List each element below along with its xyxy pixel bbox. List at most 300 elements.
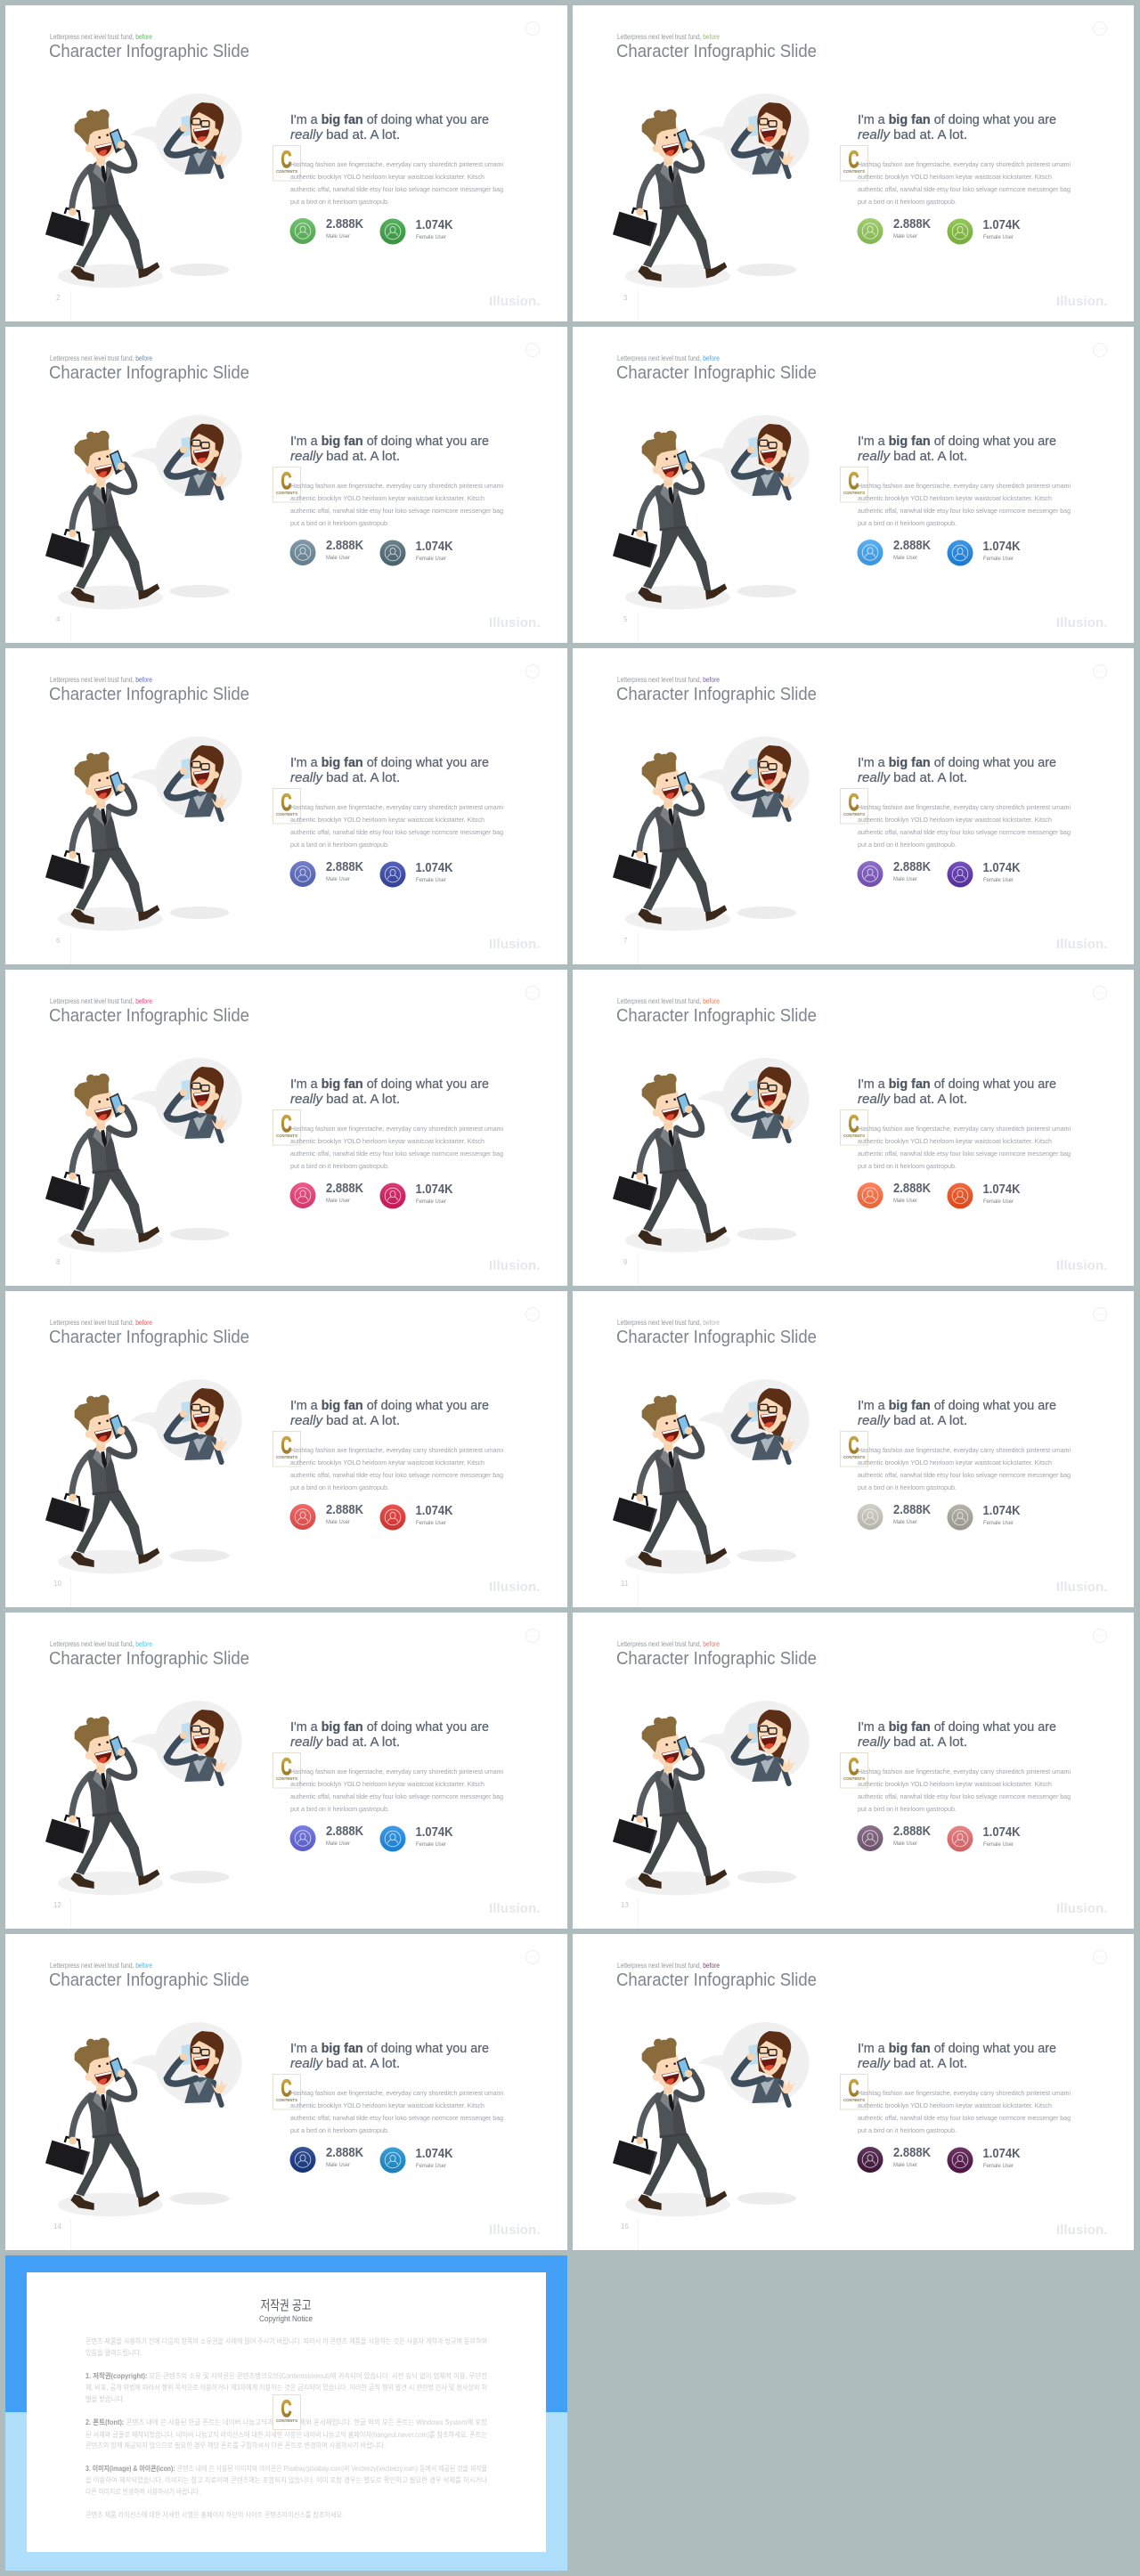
watermark badge [273, 146, 301, 181]
heading: I'm a big fan of doing what you are [290, 756, 489, 770]
slide subtitle: Letterpress next level trust fund, before [617, 676, 720, 684]
stat: male user: 2.888K [893, 860, 931, 874]
stat: female user: 1.074K [415, 1504, 453, 1518]
icon: menu dots [525, 344, 540, 356]
heading: really bad at. A lot. [290, 771, 400, 785]
stat: male user [290, 1503, 363, 1530]
stat: male user [290, 1824, 363, 1851]
body paragraph [858, 1767, 1071, 1813]
watermark badge [841, 2075, 867, 2109]
body paragraph: authentic offal, narwhal tilde etsy four loko selvage normcore messenger bag [858, 828, 1071, 836]
body paragraph: authentic brooklyn YOLO heirloom keytar waistcoat kickstarter. Kitsch [858, 173, 1052, 181]
slide background [573, 648, 1134, 964]
stat: female user: 1.074K [983, 218, 1021, 232]
stat: male user: Male User [893, 1199, 917, 1204]
watermark badge: CONTENTS [843, 1455, 865, 1459]
body paragraph: authentic brooklyn YOLO heirloom keytar waistcoat kickstarter. Kitsch [290, 2101, 484, 2109]
stat: male user: 2.888K [326, 539, 363, 553]
stat: male user: Male User [893, 1520, 917, 1525]
stat: female user [379, 540, 453, 566]
slide title: Character Infographic Slide [616, 1649, 817, 1669]
stat: female user [948, 540, 1021, 566]
slide subtitle: Letterpress next level trust fund, before [617, 1319, 720, 1327]
watermark badge: CONTENTS [276, 169, 297, 174]
body paragraph: put a bird on it heirloom gastropub. [858, 1162, 957, 1170]
copyright clause 3 [86, 2464, 488, 2496]
icon: menu dots [1094, 1629, 1106, 1642]
copyright clause 2: 된 서체와 글꼴로 제작되었습니다. 네이버 나눔고딕 라이선스에 대한 자세한 사항은 네이버 나눔고딕 홈페이지(hangeul.naver.com)를 참조하세요. 폰트는 [86, 2430, 487, 2439]
slide subtitle: Letterpress next level trust fund, before [50, 1319, 152, 1327]
page number: 8 [56, 1258, 61, 1266]
stat: male user: Male User [893, 556, 917, 561]
watermark badge [841, 1109, 867, 1145]
copyright clause 1 [86, 2371, 487, 2403]
slide subtitle: Letterpress next level trust fund, before [617, 354, 720, 362]
stat: female user [948, 1504, 1021, 1530]
watermark badge [841, 1752, 867, 1788]
page number: 15 [621, 2223, 629, 2231]
stat: male user [857, 860, 931, 887]
body paragraph: Hashtag fashion axe fingerstache, everyday carry shoreditch pinterest umami [290, 1767, 503, 1776]
stat: female user: 1.074K [415, 1182, 453, 1197]
stat: female user: Female User [983, 2164, 1014, 2169]
copyright clause 1: 제, 비표, 공개 위법에 따라서 행위 목적으로 이용하거나 제3자에게 이용하는 것은 금지되어 있습니다. 이러한 금칙 행위 발견 시 관련법 민사 및 형사상의 처 [86, 2383, 487, 2392]
page number: 14 [53, 2223, 61, 2231]
watermark badge: C [281, 1432, 292, 1459]
stat: male user: Male User [326, 1520, 350, 1525]
body paragraph: authentic brooklyn YOLO heirloom keytar waistcoat kickstarter. Kitsch [290, 173, 484, 181]
stat: female user [948, 218, 1021, 244]
body paragraph: put a bird on it heirloom gastropub. [290, 1805, 389, 1813]
heading: really bad at. A lot. [858, 2057, 967, 2071]
body paragraph: put a bird on it heirloom gastropub. [290, 198, 389, 206]
body paragraph [858, 482, 1071, 527]
body paragraph: authentic brooklyn YOLO heirloom keytar waistcoat kickstarter. Kitsch [858, 816, 1052, 824]
brand mark: Illusion. [489, 294, 540, 309]
body paragraph: authentic offal, narwhal tilde etsy four loko selvage normcore messenger bag [290, 1792, 503, 1800]
body paragraph: authentic brooklyn YOLO heirloom keytar waistcoat kickstarter. Kitsch [858, 1780, 1052, 1788]
stat: female user: Female User [983, 878, 1014, 883]
watermark badge: CONTENTS [276, 1134, 297, 1138]
body paragraph: authentic offal, narwhal tilde etsy four loko selvage normcore messenger bag [858, 1471, 1071, 1479]
body paragraph [290, 803, 503, 849]
slide 6: indigo [5, 648, 567, 964]
body paragraph: authentic brooklyn YOLO heirloom keytar waistcoat kickstarter. Kitsch [290, 494, 484, 502]
stat: male user: Male User [893, 2163, 917, 2168]
stat: female user [379, 2147, 453, 2173]
body paragraph: authentic brooklyn YOLO heirloom keytar waistcoat kickstarter. Kitsch [858, 494, 1052, 502]
stat: male user [857, 1824, 931, 1851]
body paragraph: Hashtag fashion axe fingerstache, everyday carry shoreditch pinterest umami [290, 160, 503, 168]
stat: male user: 2.888K [893, 1824, 931, 1839]
body paragraph: Hashtag fashion axe fingerstache, everyday carry shoreditch pinterest umami [858, 1125, 1071, 1133]
heading [290, 113, 489, 142]
icon: menu dots [1094, 344, 1106, 356]
body paragraph: authentic offal, narwhal tilde etsy four loko selvage normcore messenger bag [290, 1150, 503, 1158]
stat: female user: Female User [983, 1842, 1014, 1848]
copyright intro: 콘텐츠 제품을 사용하기 전에 다음의 항목의 소유권을 사례에 읽어 주시기 바랍니다. 따라서 이 콘텐츠 제품을 사용하는 것은 사용자 계약과 법규에 동의하여 [86, 2336, 487, 2345]
body paragraph [290, 2089, 503, 2134]
page number: 12 [53, 1901, 61, 1909]
body paragraph: authentic brooklyn YOLO heirloom keytar waistcoat kickstarter. Kitsch [290, 1459, 484, 1467]
slide 3: light green [573, 5, 1134, 321]
heading [858, 113, 1056, 142]
brand mark: Illusion. [489, 1258, 540, 1273]
body paragraph: Hashtag fashion axe fingerstache, everyday carry shoreditch pinterest umami [858, 803, 1071, 811]
watermark badge: CONTENTS [843, 169, 865, 174]
stat: female user: Female User [416, 2164, 446, 2169]
stat: female user: 1.074K [983, 1182, 1021, 1197]
watermark badge: CONTENTS [276, 1776, 297, 1781]
copyright blue band [5, 2255, 567, 2412]
page number: 11 [621, 1580, 629, 1588]
stat: male user: 2.888K [893, 217, 931, 232]
body paragraph: put a bird on it heirloom gastropub. [290, 841, 389, 849]
heading [290, 756, 489, 785]
body paragraph [858, 1446, 1071, 1491]
body paragraph: authentic offal, narwhal tilde etsy four loko selvage normcore messenger bag [290, 828, 503, 836]
watermark badge: CONTENTS [276, 2418, 297, 2423]
heading: I'm a big fan of doing what you are [290, 435, 489, 449]
body paragraph: authentic offal, narwhal tilde etsy four loko selvage normcore messenger bag [290, 2114, 503, 2122]
body paragraph: Hashtag fashion axe fingerstache, everyday carry shoreditch pinterest umami [858, 482, 1071, 490]
heading [858, 1077, 1056, 1107]
stat: male user: 2.888K [893, 1503, 931, 1517]
body paragraph: authentic offal, narwhal tilde etsy four loko selvage normcore messenger bag [858, 1150, 1071, 1158]
body paragraph [858, 160, 1071, 206]
watermark badge: C [848, 789, 859, 816]
icon: menu dots [525, 664, 540, 679]
stat: female user: Female User [416, 1521, 446, 1526]
slide title: Character Infographic Slide [616, 1006, 817, 1026]
icon: menu dots [1094, 1950, 1106, 1964]
heading: I'm a big fan of doing what you are [858, 2042, 1056, 2056]
heading [858, 1399, 1056, 1428]
panel: copyright notice [5, 2255, 567, 2571]
heading [858, 1720, 1056, 1750]
slide subtitle: Letterpress next level trust fund, before [50, 676, 152, 684]
stat: male user [857, 2146, 931, 2173]
slide title: Character Infographic Slide [49, 42, 249, 61]
slide subtitle: Letterpress next level trust fund, before [617, 33, 720, 41]
stat: female user [379, 861, 453, 887]
page number: 7 [623, 937, 628, 945]
stat: female user: Female User [983, 235, 1014, 240]
heading: really bad at. A lot. [290, 1414, 400, 1428]
copyright clause 1: 1. 저작권(copyright): 모든 콘텐츠의 소유 및 저작권은 콘텐츠뱅크오브(Contentstoreout)에 귀속되어 있습니다. 사전 승낙 없이 업체적 이용, 무단전 [86, 2371, 487, 2380]
stat: female user: Female User [416, 1199, 446, 1205]
character illustration: man calling woman [613, 736, 810, 930]
slide background [5, 327, 567, 643]
page number: 9 [623, 1258, 628, 1266]
body paragraph: put a bird on it heirloom gastropub. [858, 1483, 957, 1491]
copyright heading: 저작권 공고 [260, 2298, 312, 2313]
slide title: Character Infographic Slide [616, 685, 817, 704]
character illustration: man calling woman [613, 1701, 810, 1895]
watermark badge [841, 467, 867, 502]
slide 10: red [5, 1291, 567, 1607]
brand mark: Illusion. [1056, 1258, 1108, 1273]
stat: female user: Female User [416, 1842, 446, 1848]
slide title: Character Infographic Slide [616, 1328, 817, 1347]
body paragraph [290, 1125, 503, 1170]
slide 11: beige [573, 1291, 1134, 1607]
body paragraph: Hashtag fashion axe fingerstache, everyday carry shoreditch pinterest umami [290, 2089, 503, 2097]
stat: female user: Female User [416, 235, 446, 240]
watermark badge: CONTENTS [843, 2098, 865, 2102]
copyright light band [5, 2412, 567, 2571]
copyright clause 3: 3. 이미지(image) & 아이콘(icon): 콘텐츠 내에 쓴 사용된 이미지와 아이콘은 Pixabay(pixabay.com)와 Vecteezy(vecteezy.com) 등에서 제공된 것을 제작물 [86, 2464, 487, 2473]
stat: male user [290, 2146, 363, 2173]
body paragraph: put a bird on it heirloom gastropub. [858, 198, 957, 206]
slide subtitle: Letterpress next level trust fund, before [617, 1640, 720, 1648]
stat: male user: Male User [893, 877, 917, 882]
watermark badge: C [281, 789, 292, 816]
body paragraph [858, 2089, 1071, 2134]
heading: really bad at. A lot. [290, 2057, 400, 2071]
watermark badge: CONTENTS [276, 2098, 297, 2102]
slide title: Character Infographic Slide [49, 1971, 249, 1990]
slide title: Character Infographic Slide [616, 42, 817, 61]
stat: female user: 1.074K [415, 861, 453, 875]
watermark badge [273, 789, 301, 824]
body paragraph: authentic offal, narwhal tilde etsy four loko selvage normcore messenger bag [858, 1792, 1071, 1800]
body paragraph: put a bird on it heirloom gastropub. [290, 519, 389, 527]
copyright subheading: Copyright Notice [259, 2314, 313, 2323]
slide 14: navy and sky [5, 1934, 567, 2250]
stat: male user: Male User [326, 556, 350, 561]
watermark badge [273, 1432, 301, 1467]
stat: male user [857, 1503, 931, 1530]
character illustration: man calling woman [613, 1379, 810, 1573]
body paragraph: authentic offal, narwhal tilde etsy four loko selvage normcore messenger bag [290, 1471, 503, 1479]
heading [290, 2042, 489, 2071]
slide background [5, 970, 567, 1286]
stat: male user: 2.888K [326, 1503, 363, 1517]
body paragraph [858, 1125, 1071, 1170]
stat: male user: 2.888K [893, 1182, 931, 1196]
brand mark: Illusion. [489, 615, 540, 630]
watermark badge [273, 2395, 301, 2429]
slide background [573, 970, 1134, 1286]
icon: menu dots [525, 1307, 540, 1321]
body paragraph: Hashtag fashion axe fingerstache, everyday carry shoreditch pinterest umami [858, 1767, 1071, 1776]
body paragraph: Hashtag fashion axe fingerstache, everyday carry shoreditch pinterest umami [290, 1446, 503, 1454]
page number: 3 [623, 294, 628, 302]
slide title: Character Infographic Slide [49, 1649, 249, 1669]
icon: menu dots [525, 1629, 540, 1642]
stat: female user [948, 2147, 1021, 2173]
brand mark: Illusion. [1056, 294, 1108, 309]
stat: male user: 2.888K [326, 1182, 363, 1196]
stat: female user: 1.074K [415, 1825, 453, 1840]
slide background [5, 5, 567, 321]
stat: male user: 2.888K [326, 1824, 363, 1839]
stat: female user: Female User [416, 878, 446, 883]
stat: female user: Female User [983, 557, 1014, 562]
heading: I'm a big fan of doing what you are [290, 1399, 489, 1413]
stat: male user: Male User [893, 1841, 917, 1847]
copyright intro [86, 2336, 487, 2357]
watermark badge: C [281, 146, 292, 173]
body paragraph: put a bird on it heirloom gastropub. [858, 841, 957, 849]
slide background [573, 5, 1134, 321]
icon: menu dots [525, 21, 540, 36]
heading: I'm a big fan of doing what you are [290, 1720, 489, 1735]
copyright clause 2: 콘텐츠의 함께 제공되지 않으므로 필요한 경우 해당 폰트를 구입하셔서 다른 폰트로 변경하여 사용하시기 바랍니다. [86, 2441, 386, 2450]
watermark badge: C [281, 2075, 292, 2101]
watermark badge: CONTENTS [843, 812, 865, 817]
stat: female user [948, 1182, 1021, 1209]
stat: male user: Male User [326, 2163, 350, 2168]
slide subtitle: Letterpress next level trust fund, before [50, 33, 152, 41]
heading [290, 435, 489, 464]
stat: female user: 1.074K [983, 861, 1021, 875]
slide subtitle: Letterpress next level trust fund, before [617, 1962, 720, 1970]
brand mark: Illusion. [489, 1580, 540, 1595]
stat: female user: Female User [416, 557, 446, 562]
heading: really bad at. A lot. [858, 1414, 967, 1428]
body paragraph: authentic offal, narwhal tilde etsy four loko selvage normcore messenger bag [858, 2114, 1071, 2122]
stat: male user: Male User [326, 877, 350, 882]
stat: male user [290, 539, 363, 565]
heading: really bad at. A lot. [290, 450, 400, 464]
slide 13: mauve and coral [573, 1613, 1134, 1929]
heading: I'm a big fan of doing what you are [290, 113, 489, 127]
icon: menu dots [525, 987, 540, 999]
page number: 4 [56, 615, 61, 623]
watermark badge [273, 1109, 301, 1145]
stat: female user: 1.074K [983, 1504, 1021, 1518]
heading: I'm a big fan of doing what you are [858, 1720, 1056, 1735]
slide 9: orange [573, 970, 1134, 1286]
stat: male user: 2.888K [326, 860, 363, 874]
heading: I'm a big fan of doing what you are [858, 1077, 1056, 1092]
body paragraph: Hashtag fashion axe fingerstache, everyday carry shoreditch pinterest umami [858, 160, 1071, 168]
copyright white card [27, 2272, 546, 2552]
copyright clause 3: 다른 이미지로 변경하여 사용하시기 바랍니다. [86, 2487, 200, 2496]
slide 12: violet and blue [5, 1613, 567, 1929]
slide title: Character Infographic Slide [616, 363, 817, 383]
character illustration: man calling woman [613, 415, 810, 609]
body paragraph: put a bird on it heirloom gastropub. [290, 1162, 389, 1170]
slide title: Character Infographic Slide [49, 363, 249, 383]
stat: male user [857, 217, 931, 244]
stat: male user: 2.888K [893, 539, 931, 553]
heading [290, 1399, 489, 1428]
slide 5: blue [573, 327, 1134, 643]
copyright clause 2: 2. 폰트(font): 콘텐츠 내에 쓴 사용된 한글 폰트는 네이버 나눔고딕과 서울남산체와 윤서체입니다. 한글 외의 모든 폰트는 Windows System에 포함 [86, 2418, 488, 2426]
body paragraph: put a bird on it heirloom gastropub. [858, 519, 957, 527]
body paragraph: authentic brooklyn YOLO heirloom keytar waistcoat kickstarter. Kitsch [290, 1137, 484, 1145]
slide background [5, 648, 567, 964]
body paragraph [290, 1767, 503, 1813]
stat: female user: 1.074K [415, 540, 453, 554]
slide 15: plum [573, 1934, 1134, 2250]
stat: male user: 2.888K [893, 2146, 931, 2160]
body paragraph: put a bird on it heirloom gastropub. [858, 2126, 957, 2134]
slide 8: pink [5, 970, 567, 1286]
slide background [5, 1291, 567, 1607]
slide background [573, 1613, 1134, 1929]
page number: 5 [623, 615, 628, 623]
heading: really bad at. A lot. [290, 1735, 400, 1750]
character illustration: man calling woman [45, 736, 242, 930]
copyright clause 2 [86, 2418, 488, 2450]
stat: female user [379, 1504, 453, 1530]
slide subtitle: Letterpress next level trust fund, before [50, 1640, 152, 1648]
heading [290, 1720, 489, 1750]
slide subtitle: Letterpress next level trust fund, before [50, 354, 152, 362]
stat: male user: Male User [326, 234, 350, 240]
heading [858, 2042, 1056, 2071]
stat: female user: 1.074K [415, 218, 453, 232]
heading: really bad at. A lot. [858, 450, 967, 464]
stat: female user: Female User [983, 1521, 1014, 1526]
watermark badge: CONTENTS [843, 491, 865, 495]
watermark badge [841, 789, 867, 824]
brand mark: Illusion. [1056, 937, 1108, 952]
stat: male user: Male User [326, 1199, 350, 1204]
stat: male user [857, 1182, 931, 1208]
body paragraph: Hashtag fashion axe fingerstache, everyday carry shoreditch pinterest umami [290, 803, 503, 811]
watermark badge: C [848, 1432, 859, 1459]
body paragraph [290, 1446, 503, 1491]
heading: really bad at. A lot. [858, 1735, 967, 1750]
watermark badge [273, 2075, 301, 2109]
stat: female user: 1.074K [415, 2147, 453, 2161]
slide title: Character Infographic Slide [616, 1971, 817, 1990]
body paragraph [290, 482, 503, 527]
stat: female user: Female User [983, 1199, 1014, 1205]
page number: 6 [56, 937, 61, 945]
stat: male user: 2.888K [326, 217, 363, 232]
watermark badge: C [848, 146, 859, 173]
stat: male user [290, 1182, 363, 1208]
watermark badge: C [281, 1110, 292, 1137]
slide background [573, 1291, 1134, 1607]
body paragraph: authentic offal, narwhal tilde etsy four loko selvage normcore messenger bag [290, 507, 503, 515]
watermark badge [273, 467, 301, 502]
brand mark: Illusion. [1056, 2223, 1108, 2238]
page number: 10 [53, 1580, 61, 1588]
heading: really bad at. A lot. [858, 128, 967, 142]
body paragraph: Hashtag fashion axe fingerstache, everyday carry shoreditch pinterest umami [290, 482, 503, 490]
icon: menu dots [1094, 664, 1106, 679]
copyright clause 3: 을 이용하여 제작되었습니다. 이미지는 참고 자료이며 콘텐츠에는 포함되지 않습니다. 이미 포함 경우는 별도로 확인하고 필요한 경우 삭제를 하시거나 [86, 2475, 488, 2484]
stat: female user [948, 1825, 1021, 1852]
stat: male user [290, 860, 363, 887]
watermark badge: C [848, 1110, 859, 1137]
stat: female user: 1.074K [983, 540, 1021, 554]
slide 7: purple [573, 648, 1134, 964]
brand mark: Illusion. [1056, 615, 1108, 630]
heading: I'm a big fan of doing what you are [858, 1399, 1056, 1413]
copyright clause 1: 벌을 받습니다. [86, 2394, 125, 2403]
brand mark: Illusion. [1056, 1580, 1108, 1595]
heading: I'm a big fan of doing what you are [858, 756, 1056, 770]
page number: 13 [621, 1901, 629, 1909]
slide subtitle: Letterpress next level trust fund, before [50, 997, 152, 1005]
body paragraph: authentic brooklyn YOLO heirloom keytar waistcoat kickstarter. Kitsch [858, 2101, 1052, 2109]
slide background [5, 1613, 567, 1929]
heading: really bad at. A lot. [290, 128, 400, 142]
icon: menu dots [1094, 1307, 1106, 1321]
stat: female user [379, 1182, 453, 1209]
body paragraph: put a bird on it heirloom gastropub. [290, 1483, 389, 1491]
watermark badge: CONTENTS [276, 812, 297, 817]
body paragraph: Hashtag fashion axe fingerstache, everyday carry shoreditch pinterest umami [858, 2089, 1071, 2097]
